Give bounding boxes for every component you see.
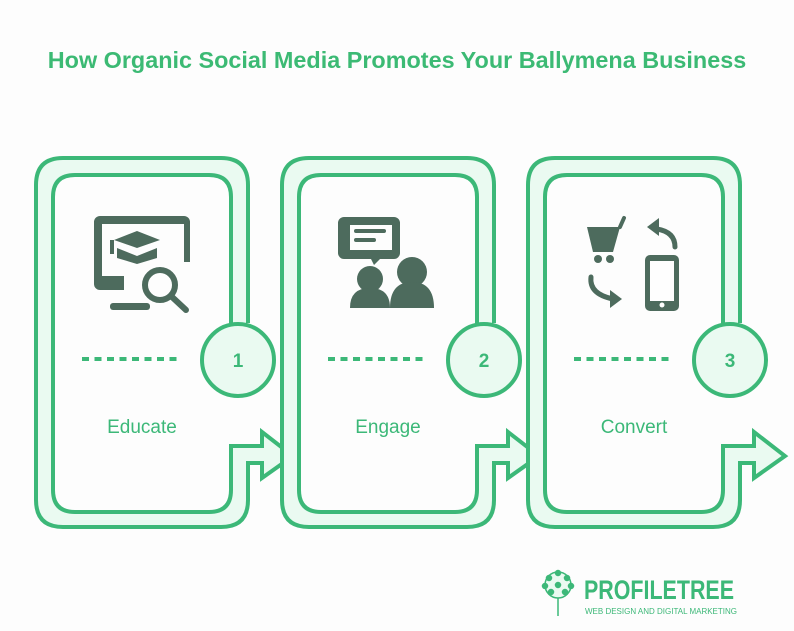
logo: ProfileTree: WEB DESIGN AND DIGITAL MARKETING (585, 606, 737, 616)
title: How Organic Social Media Promotes Your Ballymena Business (48, 47, 746, 73)
card 3: Convert (528, 158, 785, 527)
step number 3: 3 (725, 351, 735, 372)
icon: cart, phone and arrows (587, 218, 679, 311)
icon: monitor with magnifier (94, 216, 190, 310)
logo: ProfileTree: PROFILETREE (584, 575, 734, 605)
card 1: Educate (36, 158, 293, 527)
step number 2: 2 (479, 351, 489, 372)
label: Convert: Convert (601, 417, 668, 438)
label: Educate: Educate (107, 417, 177, 438)
label: Engage: Engage (355, 417, 421, 438)
logo: ProfileTree (542, 570, 737, 616)
step number 1: 1 (233, 351, 244, 372)
icon: two people chatting (338, 217, 434, 308)
card 2: Engage (282, 158, 539, 527)
